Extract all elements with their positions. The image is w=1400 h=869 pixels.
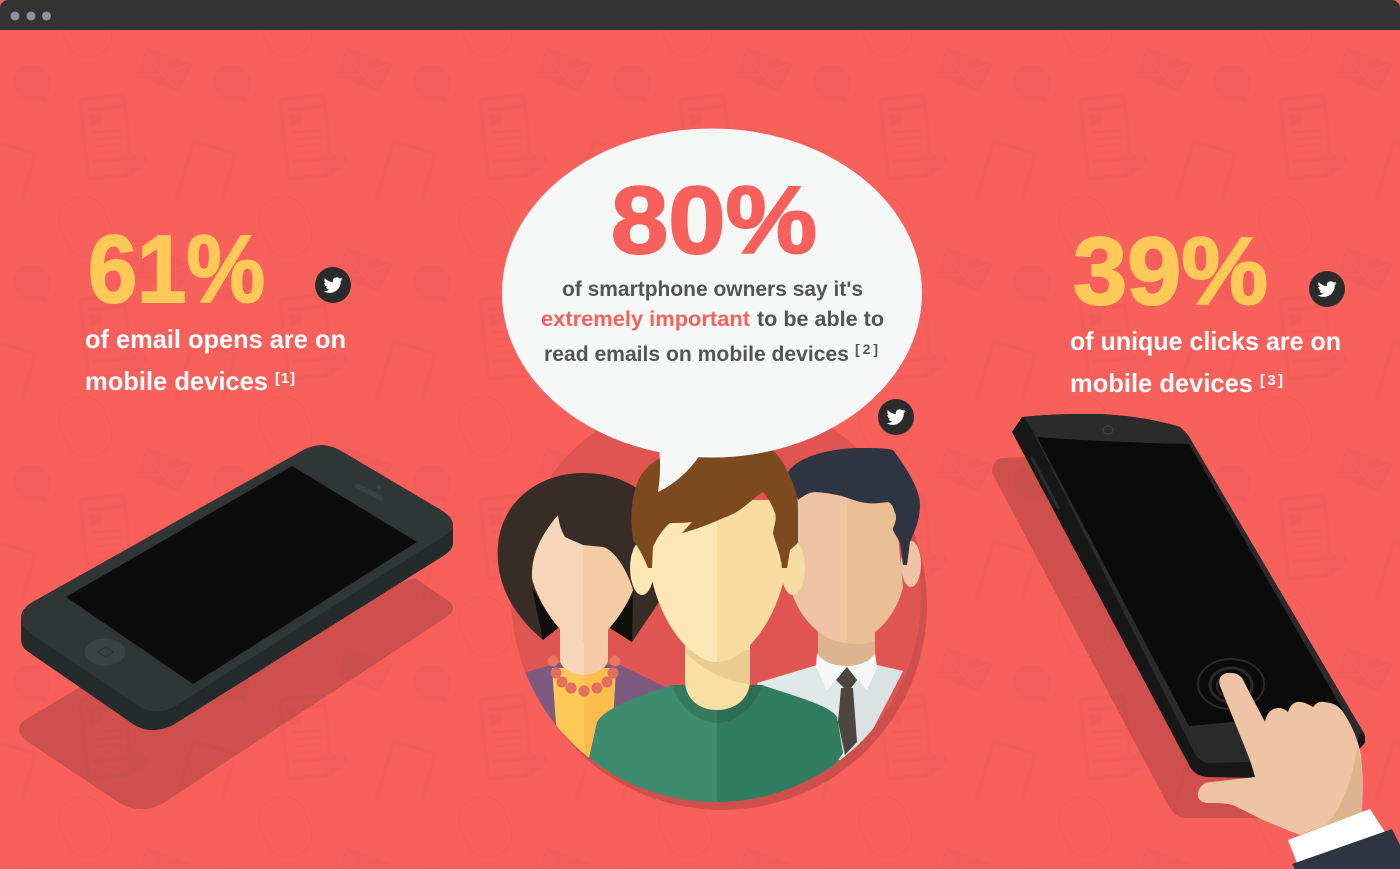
stat: 61% email opens: of email opens are on — [85, 324, 346, 354]
bubble text: extremely important — [541, 307, 750, 331]
icon: twitter centre — [878, 399, 914, 435]
stat: 39% unique clicks: [3] — [1260, 372, 1283, 389]
stat: 61% email opens: [1] — [275, 370, 295, 387]
stat: 39% unique clicks: 39% — [1073, 218, 1268, 325]
side button — [1032, 458, 1058, 508]
phone shadow — [992, 457, 1280, 818]
woman — [498, 473, 672, 780]
phone shadow — [19, 578, 453, 809]
browser title bar — [0, 0, 1400, 30]
stat: 39% unique clicks: of unique clicks are on — [1070, 326, 1341, 356]
stat: 39% unique clicks — [1070, 218, 1341, 398]
bubble text: of smartphone owners say it's — [562, 277, 863, 301]
man centre — [589, 445, 843, 830]
hand shade — [1325, 747, 1363, 826]
stat: 61% email opens — [85, 216, 346, 396]
camera — [1103, 426, 1113, 434]
bubble text — [541, 277, 884, 366]
phone body — [1012, 414, 1365, 778]
phone screen — [66, 466, 417, 684]
phone screen — [1037, 437, 1343, 726]
speaker — [357, 486, 381, 498]
bubble text: read emails on mobile devices — [544, 342, 849, 366]
bubble text: to be able to — [757, 307, 884, 331]
icon: twitter left — [315, 267, 351, 303]
icon: twitter right — [1309, 271, 1345, 307]
phone front face — [1024, 414, 1362, 763]
speech bubble — [502, 128, 922, 492]
circle — [511, 392, 921, 802]
circle shadow — [517, 400, 927, 810]
home button — [84, 638, 126, 666]
shirt cuff — [1288, 809, 1385, 863]
bubble text: [2] — [855, 341, 878, 357]
left isometric phone — [19, 445, 453, 809]
phone front face — [21, 445, 453, 712]
stat: 61% email opens: 61% — [88, 216, 265, 323]
right phone with hand — [992, 414, 1400, 869]
hand — [1198, 673, 1363, 835]
phone body — [21, 445, 453, 730]
jacket sleeve — [1292, 829, 1400, 869]
man right — [757, 448, 921, 760]
80%: 80% — [611, 167, 817, 274]
stat: 39% unique clicks: mobile devices — [1070, 368, 1253, 398]
touch ripples — [1198, 659, 1264, 709]
stat: 61% email opens: mobile devices — [85, 366, 268, 396]
people illustration — [498, 428, 927, 810]
